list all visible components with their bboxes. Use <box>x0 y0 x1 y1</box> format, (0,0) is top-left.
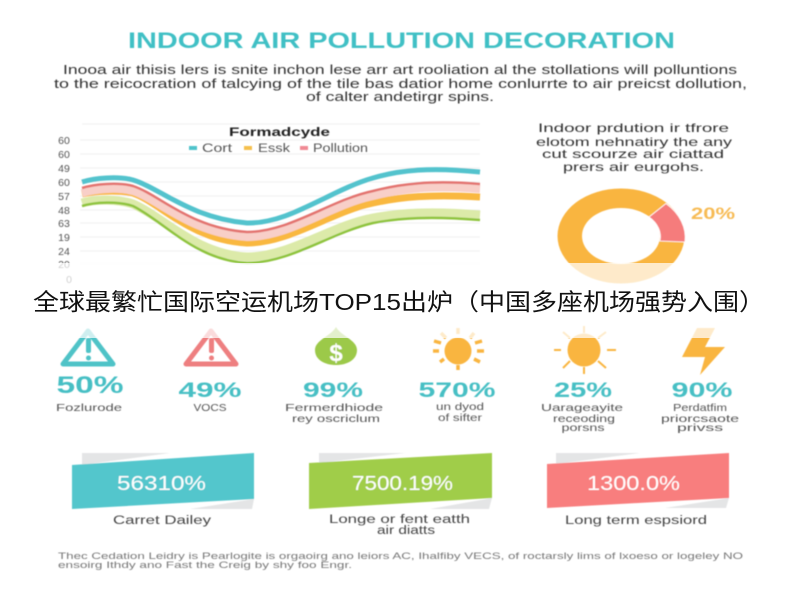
footnote: Thec Cedation Leidry is Pearlogite is orgaoirg ano leiors AC, Ihalfiby VECS, of roctarsly lims of lxoeso or logeley NO <box>58 551 743 562</box>
y axis labels: 20 <box>58 259 70 271</box>
icon: teal warning triangle <box>63 331 113 364</box>
data curves <box>82 170 480 263</box>
y axis labels: 49 <box>58 163 70 175</box>
stat: 50%: Fozlurode <box>56 402 122 414</box>
icon: green dollar drop <box>315 327 357 367</box>
banner: red: Long term espsiord <box>565 515 707 527</box>
icon: orange sun rays <box>554 326 616 374</box>
stat: 49%: VOCS <box>194 402 226 414</box>
stat: 90%: Perdatfim <box>673 402 727 414</box>
banner: green <box>309 453 492 537</box>
side note text <box>536 121 732 174</box>
banner: green: Longe or fent eatth <box>329 514 470 526</box>
stat: 25%: porsns <box>562 422 604 434</box>
donut chart <box>558 189 685 284</box>
line chart <box>58 124 480 286</box>
stat: 49%: 49% <box>178 379 242 402</box>
banner: teal: Carret Dailey <box>113 515 211 527</box>
icon: orange sun dashed <box>433 328 484 370</box>
stat: 25%: 25% <box>554 379 612 402</box>
icon: red warning triangle <box>186 331 236 364</box>
stat: 25% <box>541 379 623 434</box>
banner: red <box>547 453 729 527</box>
stat: 90%: privss <box>677 422 723 434</box>
stat: 99%: 99% <box>303 379 363 402</box>
banner: red: 1300.0% <box>587 473 680 495</box>
donut percentage: 20% <box>691 204 735 223</box>
chart title: Formadcyde <box>229 125 330 139</box>
intro text: Inooa air thisis lers is snite inchon lese arr art rooliation al the stollations will polluntions <box>63 63 737 77</box>
banner: teal: 56310% <box>117 473 206 495</box>
caption overlay: 全球最繁忙国际空运机场TOP15出炉（中国多座机场强势入围） <box>33 289 765 315</box>
stat: 570% <box>418 379 496 424</box>
stat: 90%: priorcsaote <box>661 413 739 425</box>
side note text: elotom nehnatiry the any <box>536 135 732 149</box>
banner: green: 7500.19% <box>352 473 453 495</box>
y axis labels: 60 <box>58 149 70 161</box>
chart legend: Pollution <box>313 143 368 155</box>
y axis labels: 57 <box>58 191 70 203</box>
stat: 570%: 570% <box>418 379 496 402</box>
stat: 99%: Fermerdhiode <box>285 402 383 414</box>
icon: green dollar drop: $ <box>329 340 343 367</box>
side note text: prers air eurgohs. <box>563 160 704 174</box>
stat: 50%: 50% <box>56 372 124 399</box>
stat: 50% <box>56 372 124 414</box>
y axis labels: 48 <box>58 205 70 217</box>
y axis labels: 19 <box>58 232 70 244</box>
chart legend: Cort <box>202 143 233 155</box>
footnote <box>58 551 743 571</box>
footnote: ensoirg Ithdy ano Fast the Creig by shy foo Engr. <box>58 560 352 571</box>
stat: 99% <box>285 379 383 425</box>
chart legend <box>189 143 368 155</box>
icon: lightning bolt <box>682 328 725 375</box>
y axis labels <box>58 135 72 286</box>
chart legend: Essk <box>258 143 290 155</box>
y axis labels: 60 <box>58 177 70 189</box>
y axis labels: 0 <box>66 274 72 286</box>
side note text: Indoor prdution ir tfrore <box>538 121 730 135</box>
title: INDOOR AIR POLLUTION DECORATION <box>128 28 675 53</box>
stat: 570%: of sifter <box>438 412 483 424</box>
y axis labels: 63 <box>58 218 70 230</box>
stat: 90% <box>661 379 739 434</box>
intro text: to the reicocration of talcying of the tile bas datior home conlurrte to air preicst dollution, <box>54 77 747 91</box>
y axis labels: 60 <box>58 135 70 147</box>
stat: 90%: 90% <box>672 379 733 402</box>
intro text <box>54 63 747 104</box>
side note text: cut scourze air ciattad <box>542 147 724 161</box>
stat: 99%: rey oscriclum <box>292 413 380 425</box>
y axis labels: 24 <box>58 246 70 258</box>
intro text: of calter andetirgr spins. <box>306 90 494 104</box>
banner: green: air diatts <box>377 525 435 537</box>
stat: 49% <box>178 379 242 414</box>
stat: 570%: un dyod <box>436 401 484 413</box>
banner: teal <box>72 453 254 527</box>
stat: 25%: receoding <box>553 413 615 425</box>
stat: 25%: Uarageayite <box>541 402 623 414</box>
